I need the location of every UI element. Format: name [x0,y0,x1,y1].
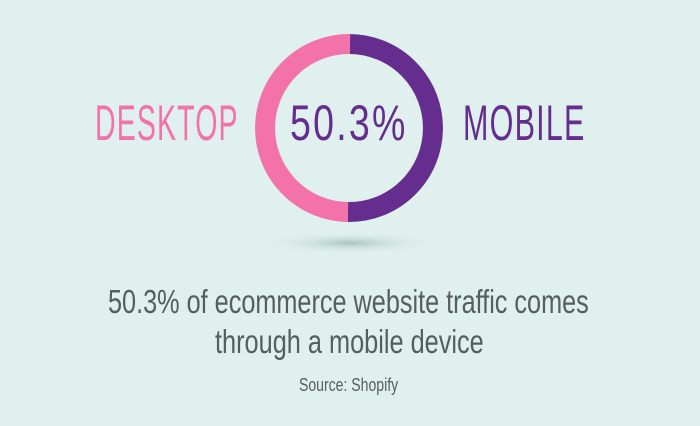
ring: desktop [265,44,350,212]
label mobile: MOBILE [463,95,586,151]
center value: 50.3% [290,95,408,151]
shadow [262,232,438,254]
source: Source: Shopify [299,375,398,395]
text: through a mobile device [215,323,484,360]
label desktop: DESKTOP [95,95,239,151]
caption: 50.3% of ecommerce website traffic comes [108,283,589,320]
ring: mobile [348,44,433,212]
